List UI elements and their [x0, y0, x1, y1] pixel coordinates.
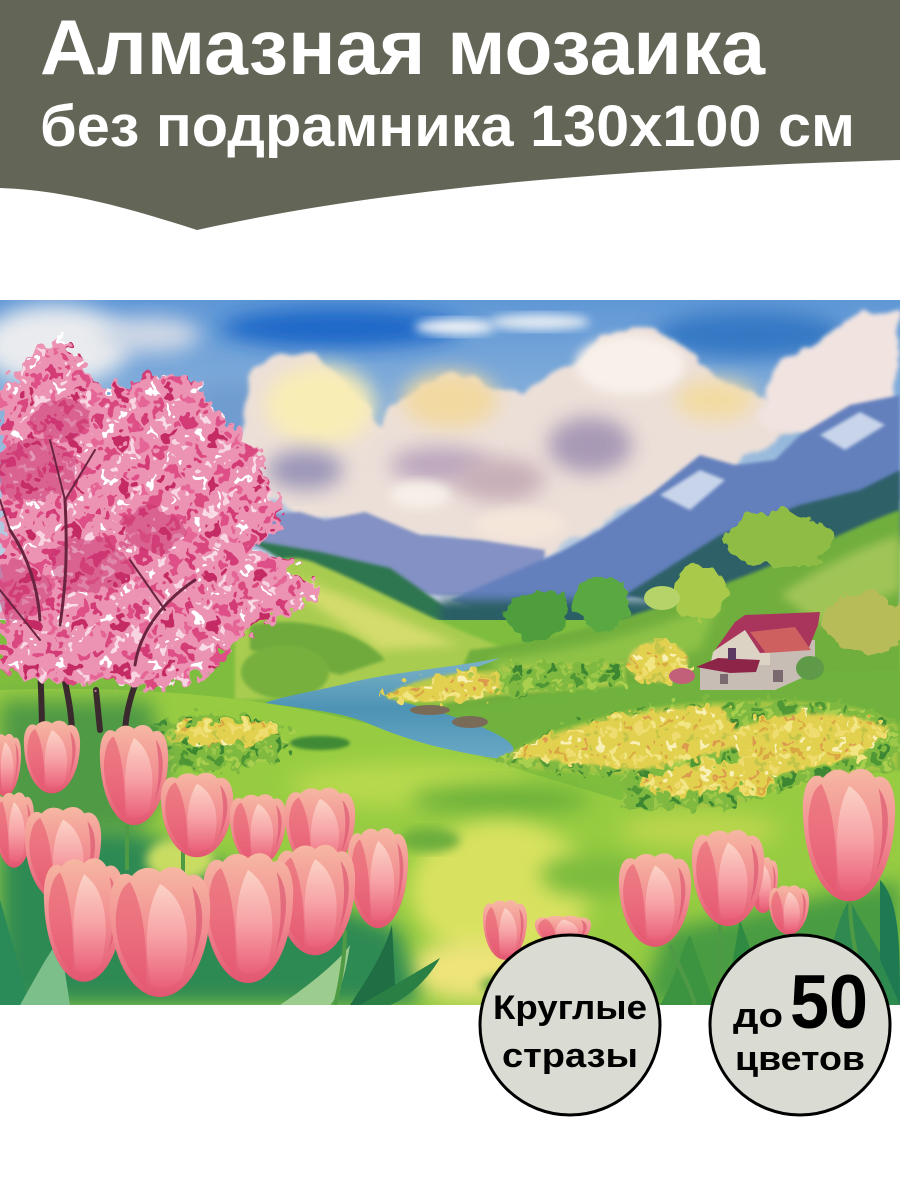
badge: round rhinestones [480, 935, 660, 1115]
hills [235, 510, 900, 720]
foreground leaves and stems [20, 825, 900, 1005]
badge text: Круглые стразы: стразы [502, 1037, 638, 1075]
badge text: Круглые стразы [493, 989, 647, 1075]
tulips [0, 721, 895, 997]
sky [0, 300, 900, 620]
blossom tree [0, 340, 317, 735]
banner [0, 0, 900, 230]
illustration: spring landscape [0, 300, 900, 1005]
subtitle: без подрамника 130х100 см [40, 94, 855, 159]
badge text: до 50 цветов [733, 960, 868, 1078]
badge text: до 50 цветов: 50 [790, 960, 868, 1045]
title: Алмазная мозаика [40, 3, 766, 91]
badge text: Круглые стразы: Круглые [493, 989, 647, 1027]
badge text: до 50 цветов: цветов [735, 1040, 865, 1078]
mountains [252, 394, 900, 620]
badge text: до 50 цветов: до [733, 997, 783, 1035]
badge: up to 50 colours [710, 935, 890, 1115]
clouds [235, 302, 900, 552]
meadow [0, 670, 900, 1005]
base green [0, 620, 900, 800]
house [669, 612, 824, 690]
river [265, 658, 514, 760]
flower bushes [385, 642, 898, 808]
